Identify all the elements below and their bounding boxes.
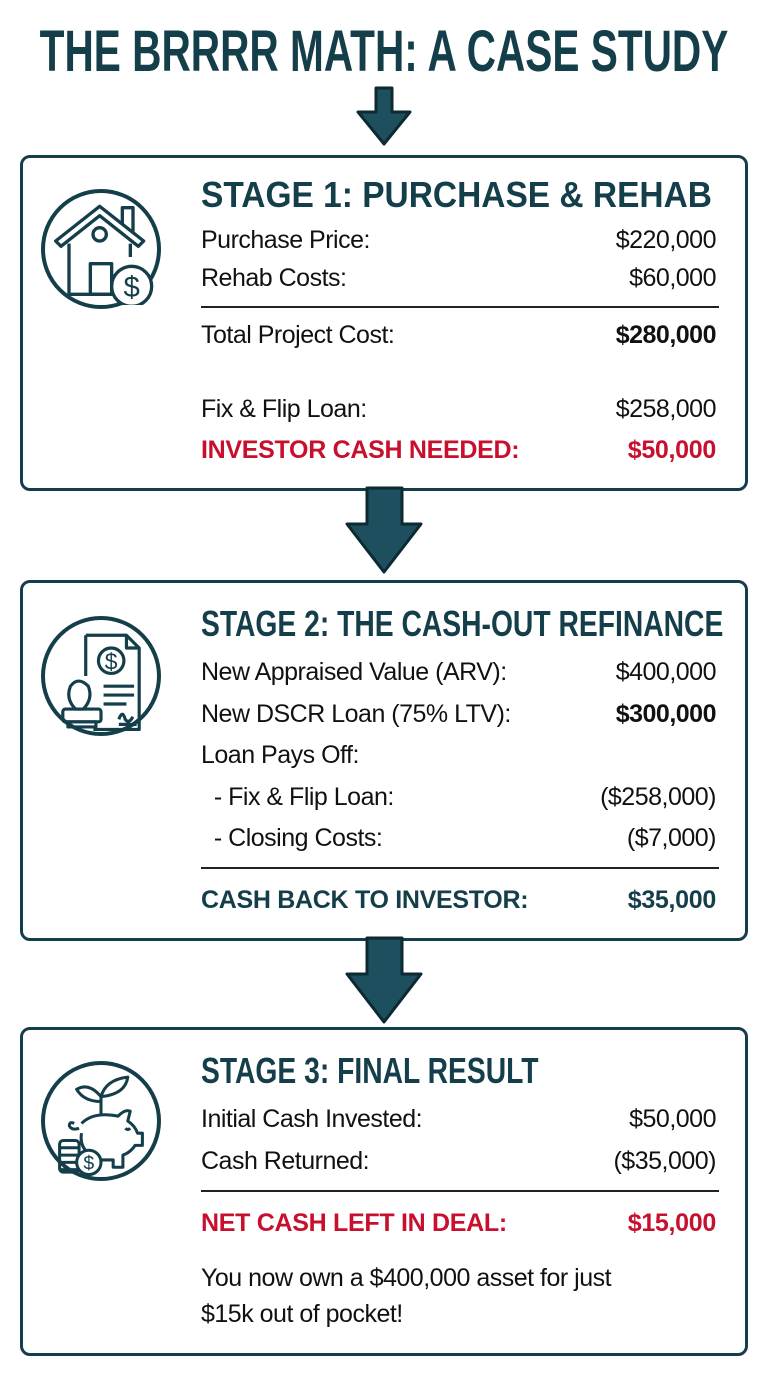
icon: house with dollar <box>41 189 161 309</box>
rows <box>201 1105 716 1133</box>
panel: stage 2: New DSCR Loan (75% LTV): <box>201 700 511 728</box>
panel: stage 2 <box>20 580 748 941</box>
panel: stage 2: ($258,000) <box>600 783 716 811</box>
rows: $220,000 <box>616 226 716 254</box>
closing text: You now own a $400,000 asset for just <box>201 1264 611 1292</box>
closing text: $15k out of pocket! <box>201 1300 403 1328</box>
heading: STAGE 2: THE CASH-OUT REFINANCE <box>201 603 723 644</box>
panel: stage 1: Rehab Costs: <box>201 264 346 292</box>
panel: stage 3 <box>20 1027 748 1356</box>
panel: stage 1: $50,000 <box>628 436 716 464</box>
rows: Purchase Price: <box>201 226 370 254</box>
panel: stage 1: Total Project Cost: <box>201 321 394 349</box>
heading: STAGE 1: PURCHASE & REHAB <box>201 174 712 215</box>
panel: stage 1: $60,000 <box>629 264 716 292</box>
icon: piggy bank with plant: $ <box>83 1153 94 1175</box>
rows <box>201 226 716 254</box>
panel: stage 1: $258,000 <box>616 395 716 423</box>
panel: stage 2: Loan Pays Off: <box>201 741 359 769</box>
panel: stage 3: $15,000 <box>628 1209 716 1237</box>
icon: document with stamp <box>41 616 161 736</box>
rows: Initial Cash Invested: <box>201 1105 422 1133</box>
panel: stage 2: $35,000 <box>628 886 716 914</box>
heading: STAGE 3: FINAL RESULT <box>201 1050 539 1091</box>
rows: $50,000 <box>629 1105 716 1133</box>
panel: stage 1: Fix & Flip Loan: <box>201 395 367 423</box>
icon: piggy bank with plant <box>41 1061 161 1181</box>
panel: stage 2: $300,000 <box>616 700 716 728</box>
panel: stage 3: NET CASH LEFT IN DEAL: <box>201 1209 507 1237</box>
panel: stage 2: - Fix & Flip Loan: <box>214 783 394 811</box>
title: THE BRRRR MATH: A CASE STUDY <box>40 19 728 84</box>
panel: stage 1 <box>20 155 748 491</box>
panel: stage 2: CASH BACK TO INVESTOR: <box>201 886 528 914</box>
panel: stage 2: ($7,000) <box>627 824 716 852</box>
arrow 3 <box>345 936 422 1024</box>
closing text <box>201 1264 612 1328</box>
icon: house with dollar: $ <box>124 271 140 304</box>
panel: stage 2: - Closing Costs: <box>214 824 382 852</box>
arrow 2 <box>345 486 422 574</box>
rows <box>201 658 716 686</box>
rows: New Appraised Value (ARV): <box>201 658 507 686</box>
arrow 1 <box>356 86 412 146</box>
panel: stage 3: ($35,000) <box>613 1147 716 1175</box>
panel: stage 3: Cash Returned: <box>201 1147 369 1175</box>
icon: document with stamp: $ <box>105 649 118 675</box>
panel: stage 1: $280,000 <box>616 321 716 349</box>
panel: stage 1: INVESTOR CASH NEEDED: <box>201 436 519 464</box>
rows: $400,000 <box>616 658 716 686</box>
